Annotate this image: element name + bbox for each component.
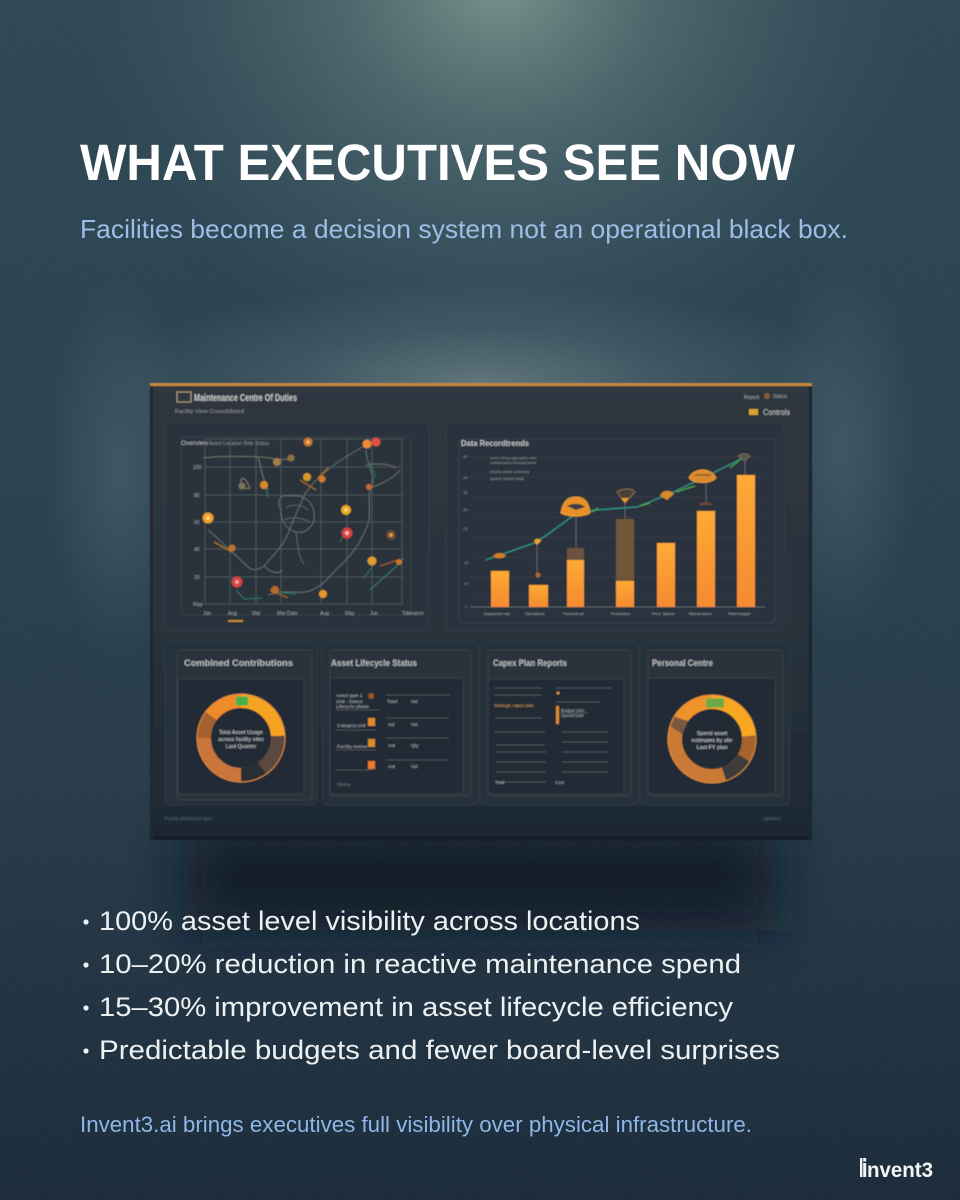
dashboard footer: Facility dashboard data xyxy=(165,816,212,821)
card: budget table: Cost xyxy=(555,780,565,785)
map axis labels: Aug xyxy=(320,611,329,617)
chart gridlines xyxy=(470,457,765,597)
card: asset list: Qty xyxy=(411,743,419,749)
dashboard footer xyxy=(165,816,781,821)
logo: nvent3 xyxy=(867,1159,933,1182)
trend line xyxy=(486,458,743,560)
bar labels: Production xyxy=(611,611,630,616)
card: asset list: Facility review xyxy=(337,744,368,750)
card: asset list: Asset Lifecycle Status xyxy=(331,658,417,669)
legend lines: asset rating aggregate data xyxy=(490,456,537,460)
map axis labels: Map xyxy=(193,602,203,608)
map axis labels: Mar Date xyxy=(277,611,298,617)
chart markers xyxy=(493,454,750,578)
card: asset list: Total xyxy=(387,699,397,705)
card: asset list: Val xyxy=(388,722,395,728)
card: donut right: estimates by site xyxy=(692,738,732,744)
card: budget table: Spend total xyxy=(561,713,583,718)
bullet list xyxy=(83,906,780,1065)
card: asset list: Val xyxy=(411,722,418,728)
card: bar chart xyxy=(446,423,784,630)
map axis labels: Tolerance xyxy=(402,611,424,617)
bar labels xyxy=(484,611,751,616)
y axis labels xyxy=(463,454,469,609)
dashboard header: Facility View Consolidated xyxy=(175,409,244,415)
y axis labels: 10 xyxy=(464,581,469,586)
card: donut left xyxy=(165,642,317,805)
ghost bars xyxy=(567,548,584,560)
dashboard header: Status xyxy=(773,394,788,400)
card: asset list: Val xyxy=(411,699,418,705)
title: WHAT EXECUTIVES SEE NOW xyxy=(80,134,796,191)
bullet 4: Predictable budgets and fewer board-level surprises xyxy=(99,1035,780,1065)
subtitle: Facilities become a decision system not an operational black box. xyxy=(80,214,848,244)
card: donut left: across facility sites xyxy=(218,737,264,743)
map axis labels: Mar xyxy=(252,611,261,617)
map axis labels xyxy=(193,465,424,617)
dashboard footer: Updated xyxy=(763,816,781,821)
y axis labels: 50 xyxy=(463,454,468,459)
card: map: Overview xyxy=(181,440,208,447)
card: budget table: Capex Plan Reports xyxy=(493,658,567,669)
card: asset list: Ast xyxy=(388,743,396,749)
legend lines: system review totals xyxy=(490,477,524,481)
legend lines xyxy=(490,456,537,481)
map axis labels: May xyxy=(345,611,355,617)
card: asset list: Category unit xyxy=(337,723,366,729)
map axis labels: 40 xyxy=(194,547,200,553)
card: bar chart: Data Recordtrends xyxy=(461,439,530,448)
bullet 2: 10–20% reduction in reactive maintenance spend xyxy=(99,949,741,979)
card: asset list: Ast xyxy=(388,764,396,770)
map axis labels: 60 xyxy=(194,520,200,526)
card: donut left: Combined Contributions xyxy=(184,658,293,669)
y axis labels: 25 xyxy=(463,526,468,531)
stems xyxy=(537,458,745,578)
legend lines: priority status summary xyxy=(490,470,529,474)
panel: dashboard xyxy=(150,383,812,840)
card: asset list: Lifecycle phase xyxy=(336,704,369,710)
card: donut left: Total Asset Usage xyxy=(219,730,263,736)
map axis labels: Aug xyxy=(228,611,237,617)
card: budget table: Total xyxy=(495,780,504,785)
bullet 1: 100% asset level visibility across locations xyxy=(99,906,640,936)
y axis labels: 15 xyxy=(464,560,469,565)
map axis labels: 80 xyxy=(194,493,200,499)
card: donut right: Last FY plan xyxy=(697,745,727,751)
y axis labels: 30 xyxy=(463,507,468,512)
dashboard header: Controls xyxy=(763,408,790,417)
map grid xyxy=(205,439,402,604)
bullet 3: 15–30% improvement in asset lifecycle efficiency xyxy=(99,992,734,1022)
donut chart right xyxy=(668,695,756,783)
card: donut right: Personal Centre xyxy=(652,658,713,669)
map axis labels: 100 xyxy=(193,465,202,471)
bars xyxy=(491,475,755,607)
bar labels: Pred. Spend xyxy=(652,611,674,616)
card: budget table: Strategic capex plan xyxy=(494,703,534,708)
dashboard header: Report xyxy=(744,395,760,401)
dashboard header: Maintenance Centre Of Duties xyxy=(194,393,297,404)
bar labels: Plant budget xyxy=(728,611,751,616)
map pins xyxy=(202,438,402,598)
y axis labels: 0 xyxy=(465,604,468,609)
card: budget table xyxy=(480,642,639,805)
bar labels: Equipment rep xyxy=(484,611,511,616)
card: donut right: Spend asset xyxy=(697,731,728,737)
map contours xyxy=(203,446,404,599)
card: donut left: Last Quarter xyxy=(226,744,256,750)
y axis labels: 40 xyxy=(463,475,468,480)
map axis labels: Jun xyxy=(370,611,378,617)
map axis labels: 20 xyxy=(194,575,200,581)
donut chart left xyxy=(197,694,285,782)
bar labels: Forecast q4 xyxy=(563,611,585,616)
dashboard header xyxy=(175,392,790,417)
legend lines: maintenance forecast trend xyxy=(490,461,536,465)
card: budget table: Budget plan xyxy=(561,708,585,713)
card: asset list: Unit - Status xyxy=(336,699,363,705)
card: asset list: Val xyxy=(411,764,418,770)
bar labels: Operations xyxy=(525,611,545,616)
closing statement: Invent3.ai brings executives full visibility over physical infrastructure. xyxy=(80,1112,752,1137)
card: asset list xyxy=(322,642,479,805)
card: donut right xyxy=(640,642,790,805)
y axis labels: 35 xyxy=(463,490,468,495)
card: asset list: Asset type 1 xyxy=(336,693,363,699)
card: map: Asset Location Risk Status xyxy=(209,441,269,447)
map axis labels: Jan xyxy=(203,611,211,617)
card: asset list: Status xyxy=(337,782,351,788)
card: map xyxy=(165,423,429,630)
bar labels: Maintenance xyxy=(689,611,713,616)
